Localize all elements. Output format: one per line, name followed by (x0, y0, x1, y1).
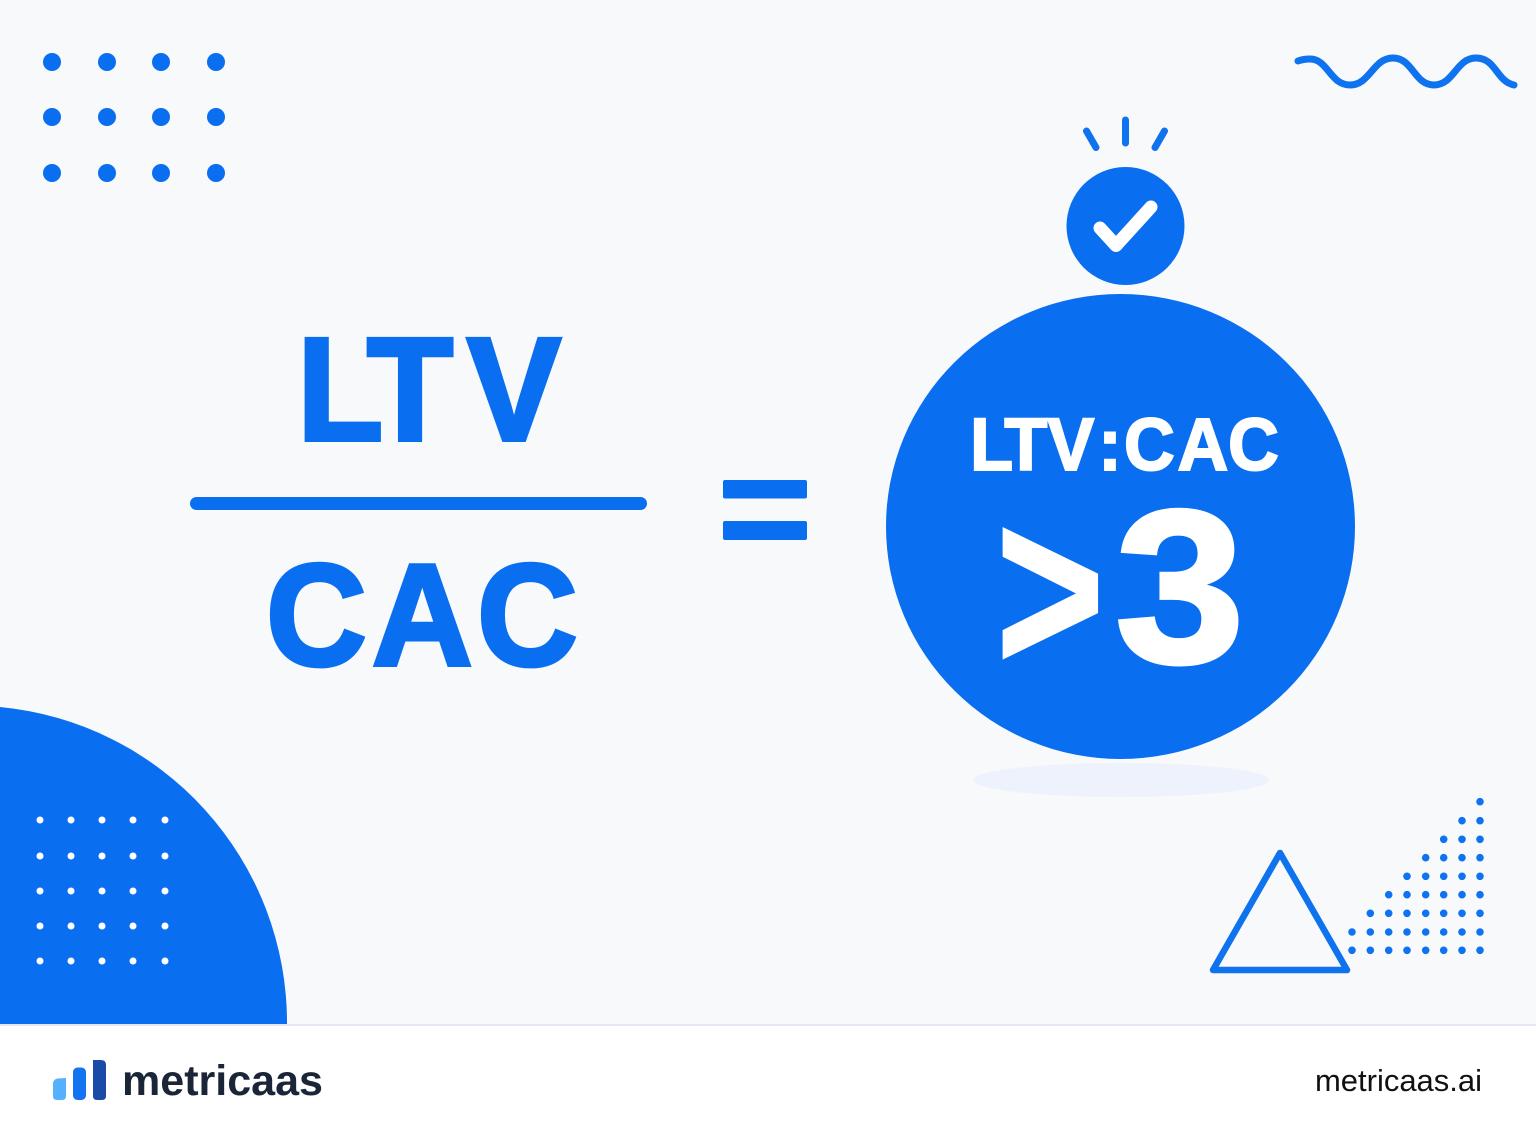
icon: check badge with rays (1066, 120, 1184, 285)
equals sign (723, 480, 807, 540)
denominator CAC: CAC (266, 534, 578, 697)
result label: LTV:CAC (970, 404, 1279, 486)
result circle: LTV:CAC >3 (886, 294, 1355, 759)
circle shadow (973, 763, 1269, 797)
triangle outline (1213, 853, 1347, 970)
numerator LTV: LTV (297, 307, 561, 472)
footer bar (0, 1024, 1536, 1136)
fraction bar (190, 497, 647, 510)
dot staircase (1348, 798, 1484, 954)
corner quarter circle with dots (0, 707, 287, 1024)
wave squiggle: top right (1298, 58, 1514, 85)
brand name: metricaas (122, 1057, 323, 1105)
icon: metricaas bar logo (53, 1060, 106, 1100)
formula: LTV over CAC (190, 307, 647, 697)
result value (996, 458, 1245, 723)
website url: metricaas.ai (1315, 1063, 1482, 1098)
dot grid: top left (43, 53, 225, 182)
result value: > (996, 458, 1104, 723)
result value: 3 (1115, 465, 1245, 708)
